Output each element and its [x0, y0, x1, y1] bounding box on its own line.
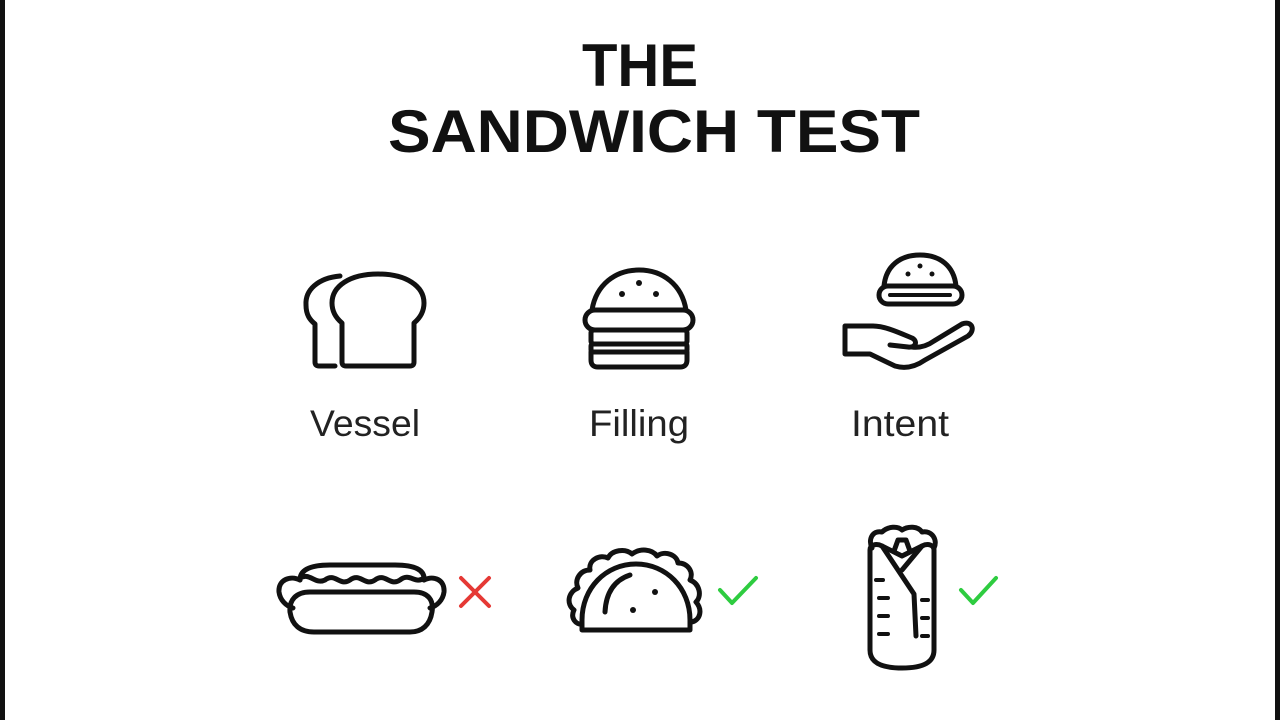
- icon: burger (filling): [585, 270, 693, 367]
- icon: green check (taco): [720, 578, 756, 603]
- title: THE: [582, 32, 698, 99]
- label: Vessel: Vessel: [310, 403, 420, 444]
- icon: bread (vessel): [306, 274, 424, 366]
- icon: hand with burger (intent): [845, 255, 972, 367]
- title: [388, 32, 920, 165]
- icon: burrito: [870, 527, 935, 668]
- icon: red cross: [461, 578, 489, 606]
- title: SANDWICH TEST: [388, 98, 920, 165]
- icon: taco: [569, 550, 700, 630]
- icon: green check (burrito): [961, 578, 996, 603]
- label: Intent: Intent: [851, 403, 950, 444]
- label: Filling: Filling: [589, 403, 689, 444]
- icon: hot dog: [279, 565, 444, 632]
